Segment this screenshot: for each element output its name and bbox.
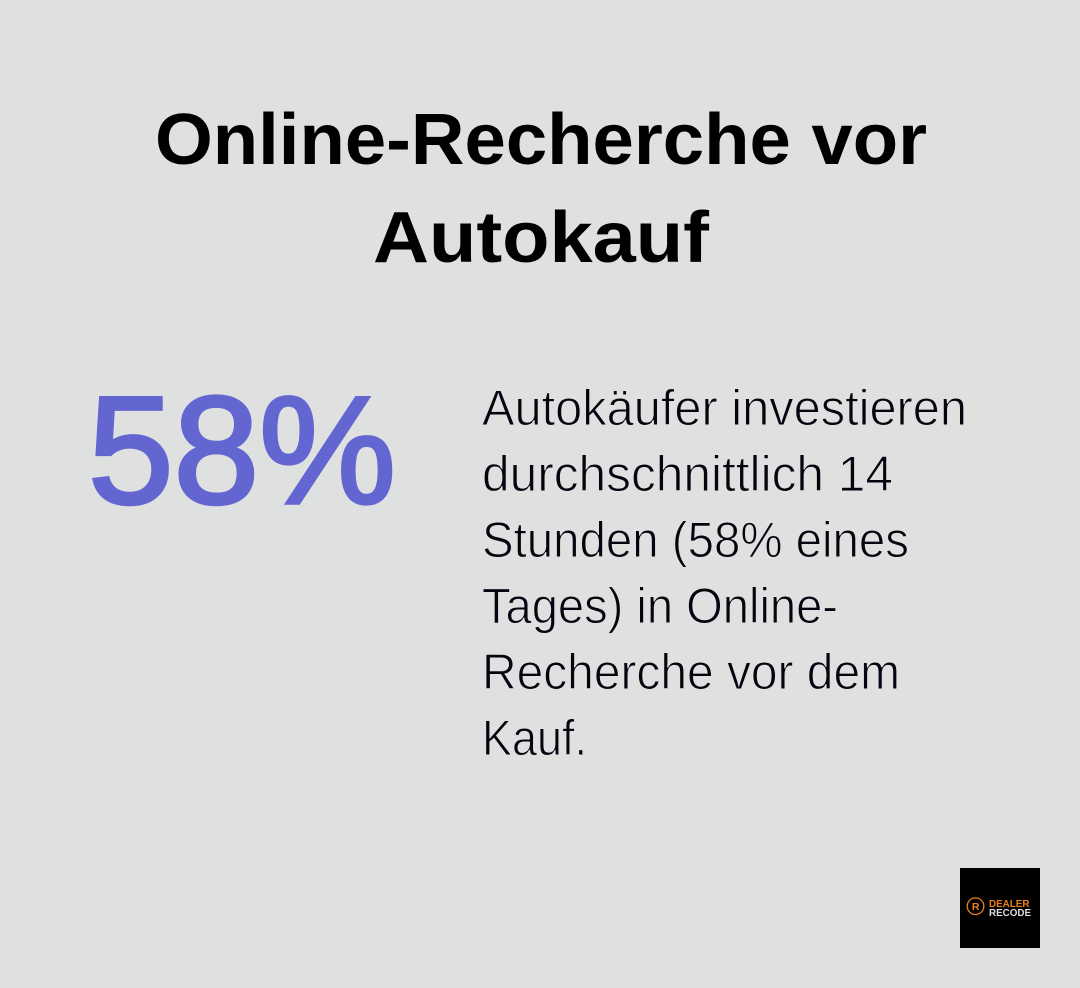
logo wordmark: DEALER xyxy=(989,899,1030,910)
logo wordmark xyxy=(989,899,1031,919)
description text: Tages) in Online- xyxy=(482,578,838,634)
description text: Recherche vor dem xyxy=(482,644,900,700)
description text: durchschnittlich 14 xyxy=(482,446,893,502)
title: Online-Recherche vor xyxy=(155,100,927,180)
description text: Kauf. xyxy=(482,710,587,766)
big stat: 58%: 58% xyxy=(88,365,396,536)
icon: R in circle: R xyxy=(972,901,980,913)
description text xyxy=(482,380,967,766)
title xyxy=(155,100,927,278)
title: Autokauf xyxy=(373,198,710,278)
description text: Autokäufer investieren xyxy=(482,380,967,436)
logo: Dealer Recode xyxy=(960,868,1040,948)
logo wordmark: RECODE xyxy=(989,908,1031,919)
description text: Stunden (58% eines xyxy=(482,512,909,568)
